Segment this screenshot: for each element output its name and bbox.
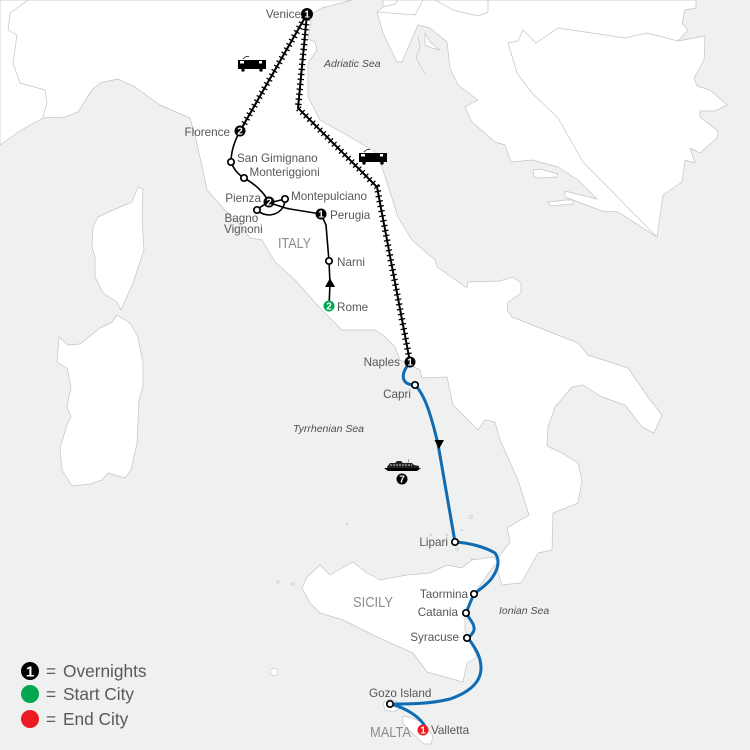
badges: overnight counts: 1 — [420, 726, 426, 736]
city labels: Pienza — [225, 192, 261, 205]
small islands — [270, 515, 473, 676]
city labels: Gozo Island — [369, 687, 431, 700]
badges: overnight counts: 2 — [237, 126, 243, 138]
land: Croatian islands — [425, 33, 573, 206]
city labels: Lipari — [419, 536, 448, 549]
badges: overnight counts: 1 — [304, 10, 310, 20]
legend: start city: = — [46, 684, 56, 704]
city labels: Syracuse — [410, 631, 459, 644]
badges: overnight counts — [234, 8, 428, 736]
badges: overnight counts: 2 — [266, 198, 272, 208]
legend: end city — [21, 709, 129, 729]
land: Malta — [383, 699, 433, 744]
land: Sardinia — [57, 315, 143, 486]
cruise route: Naples to Valletta — [391, 362, 498, 728]
badge: cruise nights 7 — [396, 474, 408, 486]
region labels: SICILY — [353, 595, 393, 611]
legend: end city: = — [46, 709, 56, 729]
legend: start city — [21, 684, 134, 704]
badges: overnight counts: 1 — [407, 358, 413, 368]
city labels: Vignoni — [224, 223, 263, 236]
land: Italy and western Europe — [0, 0, 662, 585]
arrow: northbound — [325, 278, 335, 287]
stops: white markers — [228, 159, 477, 707]
legend: start city: Start City — [63, 684, 134, 704]
city labels — [185, 8, 470, 737]
sea labels: Ionian Sea — [499, 605, 549, 617]
icon: train near Adriatic — [359, 150, 387, 165]
city labels: Bagno — [224, 212, 259, 225]
icon: cruise ship — [384, 459, 421, 471]
city labels: Taormina — [420, 588, 468, 601]
road route: Rome to Perugia — [321, 214, 330, 306]
sea labels — [293, 58, 549, 617]
rail route: Venice to Naples — [298, 14, 410, 362]
city labels: Montepulciano — [291, 190, 368, 203]
city labels: Naples — [364, 356, 400, 369]
region labels: ITALY — [278, 236, 311, 252]
legend: overnights — [21, 661, 147, 681]
region labels: MALTA — [370, 725, 411, 741]
legend: overnights: = — [46, 661, 56, 681]
arrow: southbound cruise — [434, 440, 444, 449]
land: Sicily — [302, 557, 498, 682]
region labels — [278, 236, 411, 741]
city labels: Capri — [383, 388, 411, 401]
city labels: Venice — [266, 8, 301, 21]
city labels: Rome — [337, 301, 368, 314]
legend — [21, 661, 147, 729]
internal borders — [8, 0, 678, 237]
road route: Pienza loops — [257, 199, 321, 215]
city labels: Monteriggioni — [250, 166, 320, 179]
rail route: Venice to Florence — [240, 14, 307, 131]
city labels: Florence — [185, 126, 230, 139]
badges: overnight counts: 2 — [326, 302, 332, 312]
badge: cruise nights 7: 7 — [399, 474, 405, 486]
land: Corsica — [92, 187, 144, 310]
city labels: Perugia — [330, 209, 371, 222]
road route: Florence to Pienza — [231, 131, 269, 203]
city labels: Narni — [337, 256, 365, 269]
icon: train near Florence — [238, 56, 266, 72]
city labels: San Gimignano — [237, 152, 318, 165]
land: Balkan coast — [377, 0, 727, 237]
sea labels: Tyrrhenian Sea — [293, 423, 364, 435]
legend: overnights: 1 — [26, 664, 34, 680]
city labels: Valletta — [431, 724, 470, 737]
city labels: Catania — [418, 606, 458, 619]
legend: overnights: Overnights — [63, 661, 147, 681]
sea labels: Adriatic Sea — [323, 58, 381, 70]
legend: end city: End City — [63, 709, 129, 729]
badges: overnight counts: 1 — [318, 210, 324, 220]
